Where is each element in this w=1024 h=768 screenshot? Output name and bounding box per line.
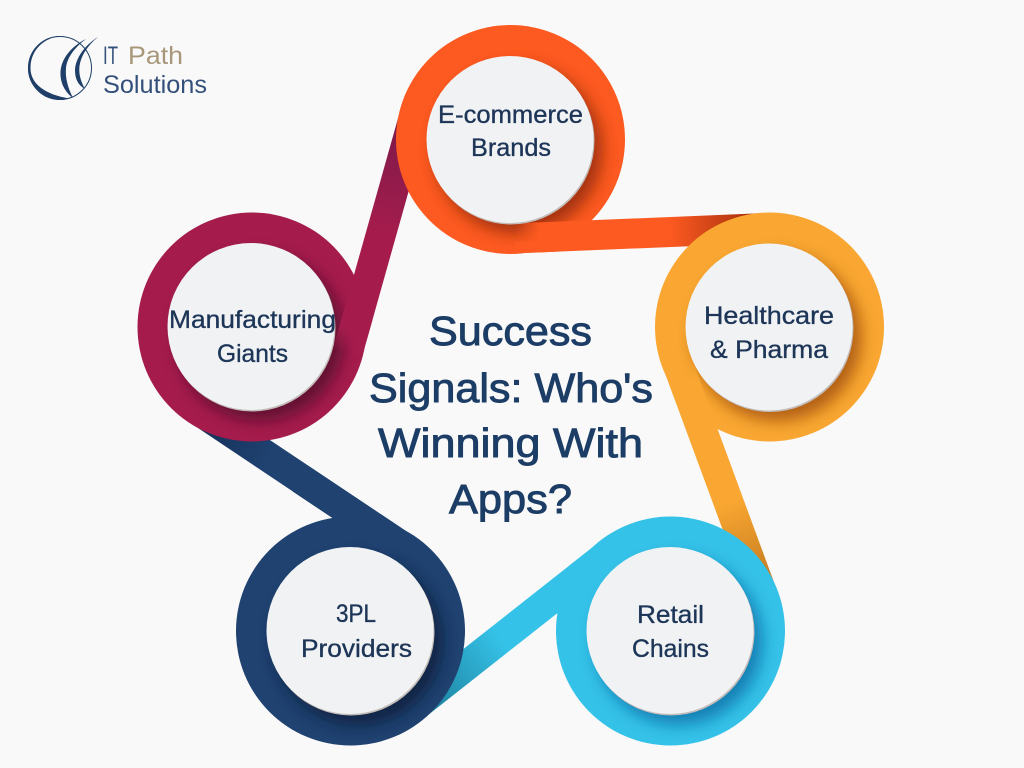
title: Apps? (449, 476, 572, 522)
node: E-commerce Brands: Brands (471, 134, 551, 162)
node: Retail Chains: Chains (632, 635, 709, 663)
node: E-commerce Brands (426, 56, 594, 224)
node: E-commerce Brands: E-commerce (438, 101, 583, 129)
logo text: IT (103, 42, 118, 70)
node: Retail Chains (586, 547, 754, 716)
node: Retail Chains: Retail (637, 601, 704, 629)
title (369, 308, 653, 522)
ring: 3PL (236, 516, 465, 746)
node: Healthcare & Pharma: Healthcare (704, 302, 834, 330)
logo icon: circle with swooshes (28, 36, 98, 100)
ring: Healthcare (655, 212, 884, 442)
band: 3PL start over its ring (301, 479, 411, 549)
band: 3PL to Manufacturing (197, 409, 406, 549)
node: Manufacturing Giants: Giants (217, 340, 288, 368)
band: Retail to 3PL (412, 546, 609, 709)
node: Healthcare & Pharma: & Pharma (710, 336, 828, 364)
node: 3PL Providers: 3PL (336, 600, 376, 628)
title: Winning With (378, 420, 643, 466)
logo text: Solutions (103, 71, 207, 99)
band: Manufacturing to E-commerce (347, 113, 415, 356)
band: Healthcare to Retail (668, 361, 763, 597)
title: Success (429, 308, 592, 354)
band: E-commerce to Healthcare (515, 228, 765, 248)
node: 3PL Providers (266, 547, 434, 716)
logo text (103, 42, 207, 99)
ring: Retail (556, 516, 785, 746)
node: Healthcare & Pharma (686, 244, 854, 412)
title: Signals: Who's (369, 365, 653, 411)
node: 3PL Providers: Providers (301, 635, 412, 663)
logo text: Path (128, 42, 183, 70)
ring: E-commerce (396, 25, 625, 254)
node: Manufacturing Giants: Manufacturing (169, 306, 336, 334)
node: Manufacturing Giants (168, 243, 336, 412)
ring: Manufacturing (138, 212, 366, 442)
logo: IT Path Solutions (28, 36, 207, 100)
